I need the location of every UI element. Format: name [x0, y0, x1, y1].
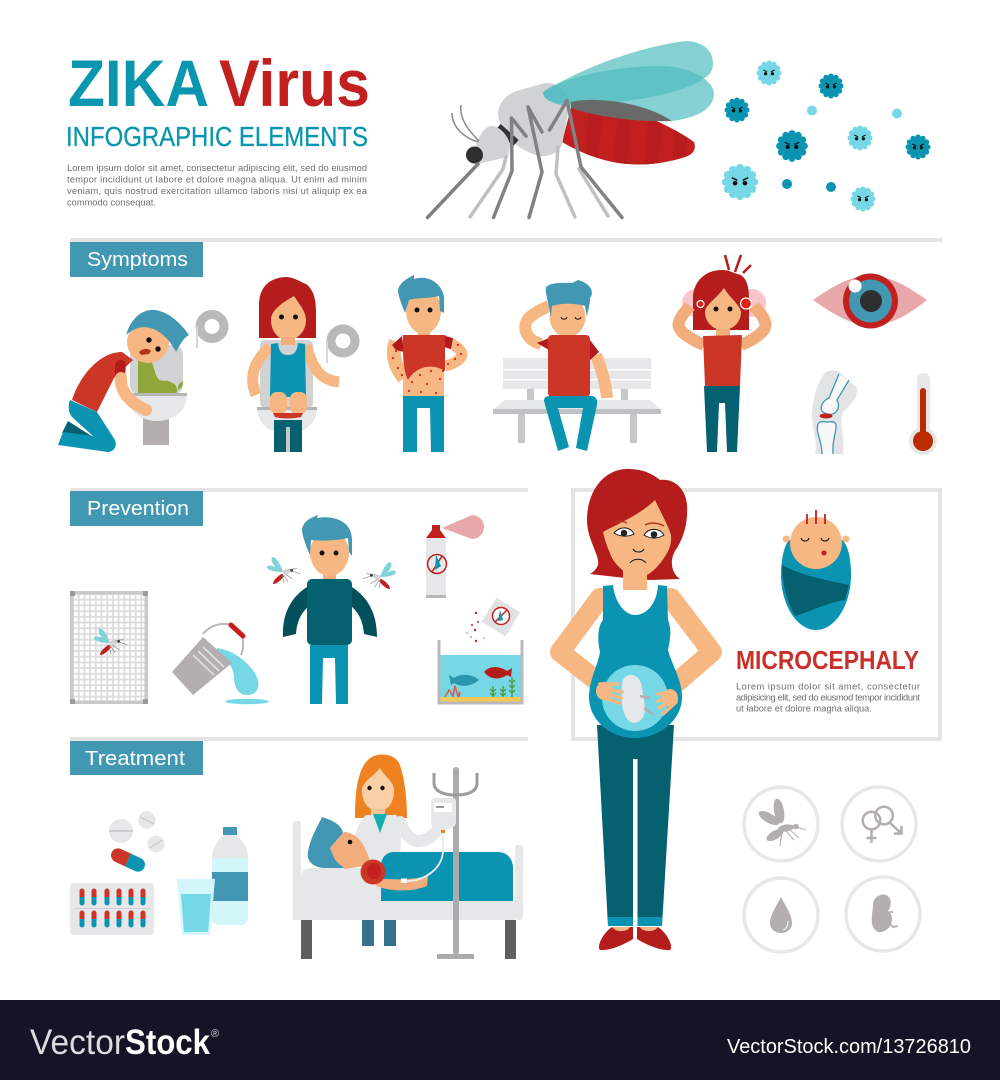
hand palms [596, 682, 678, 707]
icon: toilet paper 2 [326, 329, 355, 363]
hair [587, 469, 687, 580]
glass of water [177, 879, 215, 935]
heading: Prevention [70, 491, 203, 526]
baby [781, 510, 851, 630]
body text: adipisicing elit, sed do eiusmod tempor incididunt [736, 692, 920, 702]
icon: red eye [813, 274, 927, 328]
intro text: Lorem ipsum dolor sit amet, consectetur adipiscing elit, sed do eiusmod [67, 163, 367, 173]
icon: thermometer [909, 373, 937, 455]
icon: knee joint [812, 370, 857, 454]
neck [623, 565, 647, 590]
heading: Treatment: Treatment [85, 747, 185, 770]
repellent spray [426, 515, 484, 598]
body text: ut labore et dolore magna aliqua. [736, 704, 872, 714]
symptom: man with rash [392, 275, 462, 452]
virus particles [722, 60, 931, 212]
body text: Lorem ipsum dolor sit amet, consectetur [736, 682, 920, 692]
doctor [352, 755, 438, 862]
title: ZIKA: ZIKA [68, 46, 209, 120]
intro text [67, 163, 368, 208]
symptom: woman on toilet [253, 277, 339, 452]
symptom: tired man on bench [493, 280, 661, 451]
icon: fetus [846, 877, 920, 951]
hands [600, 684, 676, 714]
larvicide packet [466, 598, 520, 642]
iv stand [407, 767, 477, 959]
icon: mosquito transmission [744, 787, 818, 861]
body text [736, 682, 920, 714]
man with mosquitoes [267, 515, 396, 704]
blanket [381, 852, 513, 901]
womb and fetus [602, 665, 668, 731]
subtitle: INFOGRAPHIC ELEMENTS [66, 121, 368, 152]
footer bar [0, 1000, 1000, 1080]
water bottle [212, 827, 248, 925]
intro text: veniam, quis nostrud exercitation ullamco laboris nisi ut aliquip ex ea [67, 186, 368, 196]
stock id: VectorStock.com/13726810 [727, 1036, 971, 1058]
bench [493, 358, 661, 443]
logo: Stock [125, 1023, 210, 1062]
icon: sexual transmission [842, 787, 916, 861]
heading: Symptoms [70, 242, 203, 277]
patient arm [360, 860, 428, 890]
trousers [597, 725, 674, 926]
shoes [599, 927, 671, 950]
title: Virus: Virus [219, 46, 370, 120]
intro text: tempor incididunt ut labore et dolore magna aliqua. Ut enim ad minim [67, 174, 367, 184]
heading: Prevention: Prevention [87, 497, 189, 520]
icon: toilet paper [196, 314, 224, 348]
bucket pouring water [172, 624, 269, 704]
symptom: woman with headache [679, 255, 766, 452]
intro text: commodo consequat. [67, 198, 156, 208]
symptom: vomiting man [58, 310, 189, 452]
logo: Vector [30, 1023, 125, 1062]
hospital bed scene [293, 755, 523, 959]
logo: ® [211, 1028, 219, 1040]
bed frame [293, 821, 523, 920]
heading: Treatment [70, 741, 203, 775]
patient head [308, 817, 372, 869]
heading: Symptoms: Symptoms [87, 248, 188, 271]
mosquito net [70, 591, 148, 704]
blister pack [70, 883, 154, 935]
panel: microcephaly [573, 490, 940, 739]
trouser cuffs [608, 917, 662, 926]
arms [560, 598, 712, 692]
heading: microcephaly: MICROCEPHALY [736, 645, 919, 675]
pills [109, 811, 164, 874]
doctor legs [362, 918, 396, 946]
aquarium [439, 640, 522, 703]
pregnant woman [560, 469, 712, 950]
face [603, 500, 671, 578]
tank top [589, 585, 682, 738]
logo [30, 1023, 219, 1062]
icon: blood drop [744, 878, 818, 952]
title block [66, 46, 370, 208]
large mosquito [428, 41, 714, 218]
